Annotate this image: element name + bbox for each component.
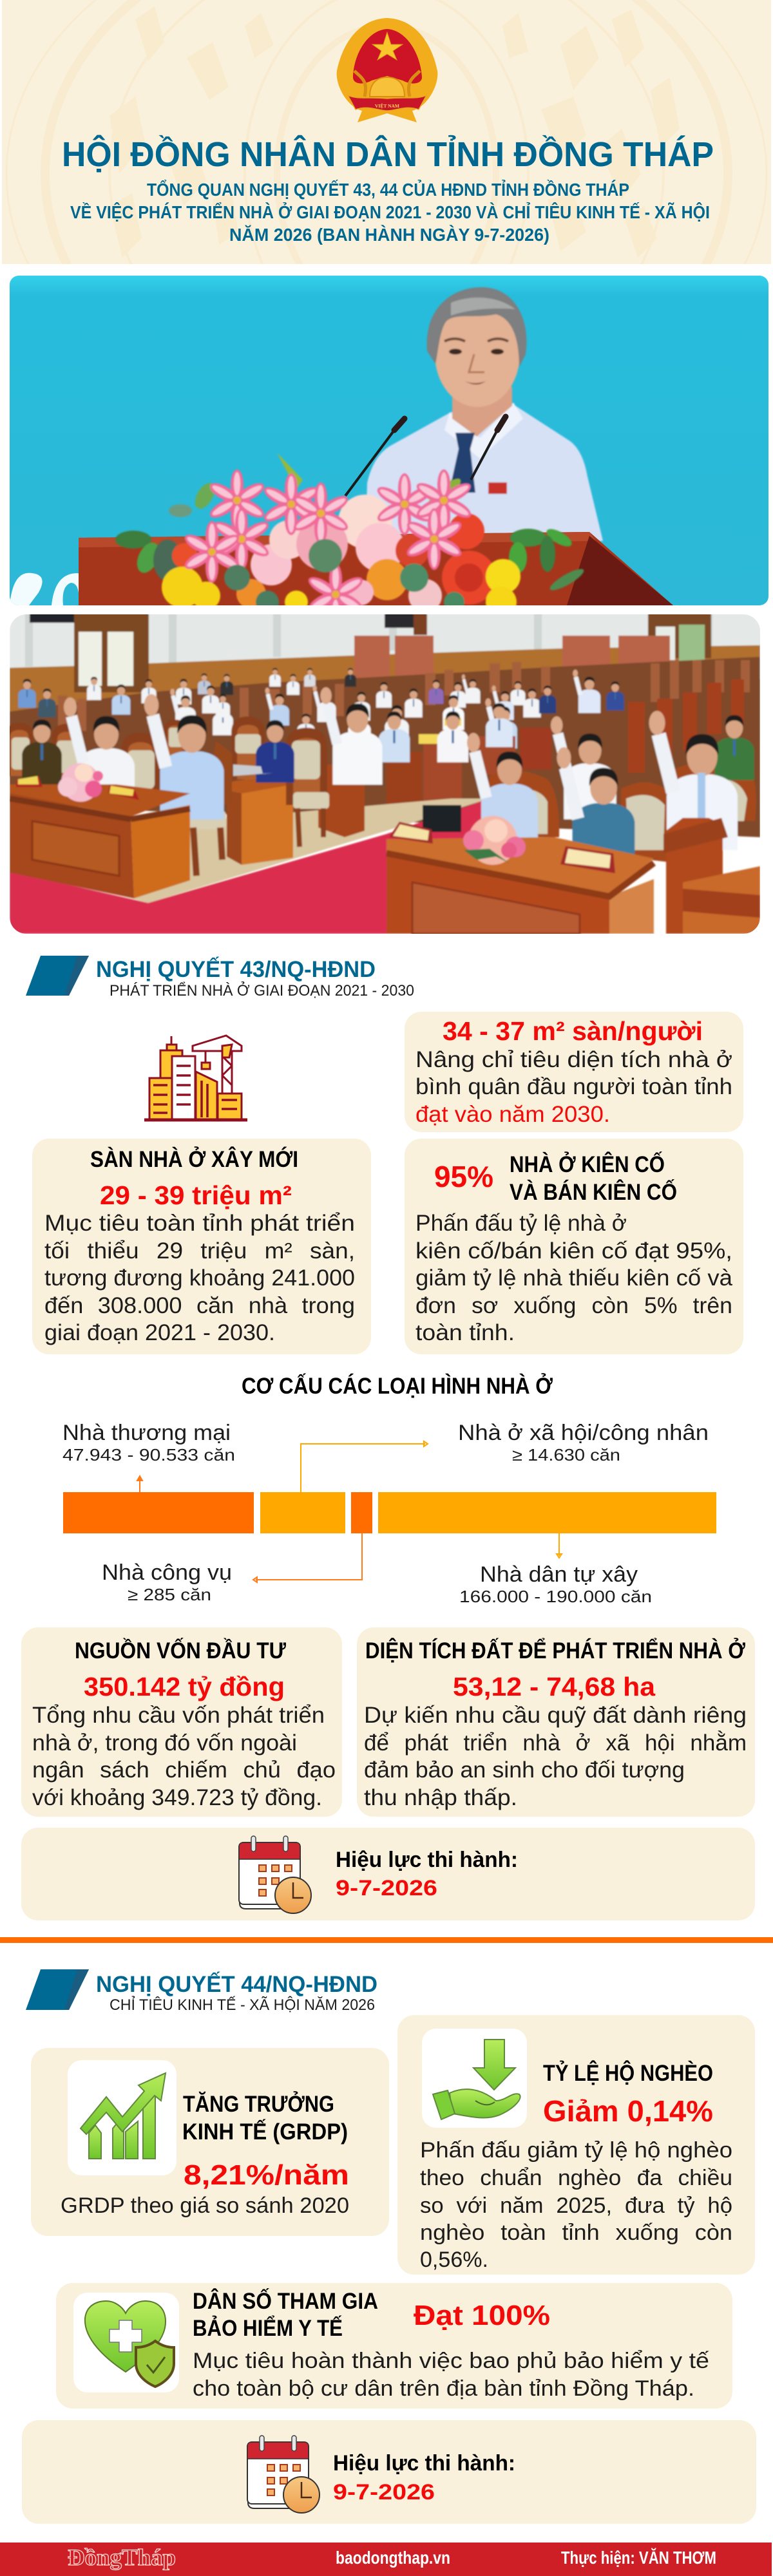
label: social: Nhà ở xã hội/công nhân: [458, 1421, 709, 1445]
section heading: resolution 44: CHỈ TIÊU KINH TẾ - XÃ HỘI NĂM 2026: [110, 1995, 375, 2014]
label: official: Nhà công vụ: [102, 1560, 232, 1585]
bar segment: official: [351, 1492, 372, 1533]
wall: [10, 612, 763, 679]
card: poverty rate: Giảm 0,14%: [543, 2094, 713, 2128]
effective date text: Hiệu lực thi hành:: [336, 1848, 518, 1872]
label: official: [102, 1560, 232, 1604]
header banner: [2, 0, 771, 264]
wainscot: [10, 645, 760, 715]
icon: heart and shield: [73, 2293, 179, 2392]
arrow: self-built: [557, 1533, 562, 1558]
card: land area: để phát triển nhà ở xã hội nhằm: [364, 1730, 747, 1756]
right flowers and plates: [468, 816, 517, 865]
subtitle: [70, 179, 710, 245]
card: GRDP growth: TĂNG TRƯỞNG: [183, 2091, 334, 2117]
card: land area: đảm bảo an sinh cho đối tượng: [364, 1757, 685, 1783]
website: baodongthap.vn: [336, 2548, 450, 2568]
label: social: ≥ 14.630 căn: [512, 1445, 620, 1464]
card: investment capital: với khoảng 349.723 tỷ đồng.: [32, 1785, 322, 1810]
credit: Thực hiện: VĂN THƠM: [561, 2548, 716, 2568]
far delegates: [18, 668, 624, 748]
card: permanent housing rate: VÀ BÁN KIÊN CỐ: [510, 1179, 677, 1205]
laptop: [233, 764, 274, 776]
card: health insurance: BẢO HIỂM Y TẾ: [193, 2315, 343, 2341]
cog: [370, 77, 405, 97]
icon: calendar and clock: [247, 2436, 320, 2513]
icon: arrow and hand: [422, 2029, 527, 2128]
icon: growth chart: [68, 2060, 177, 2175]
effective date text: 9-7-2026: [333, 2480, 435, 2505]
speaker: [365, 287, 603, 547]
section heading: resolution 44: [26, 1969, 377, 2014]
card: new housing floor area: đến 308.000 căn nhà trong: [44, 1293, 355, 1318]
title: HỘI ĐỒNG NHÂN DÂN TỈNH ĐỒNG THÁP: [62, 135, 714, 174]
section heading: resolution 43: PHÁT TRIỂN NHÀ Ở GIAI ĐOẠN 2021 - 2030: [110, 981, 414, 999]
card: investment capital: nhà ở, trong đó vốn ngoài: [32, 1730, 297, 1756]
effective date text: 9-7-2026: [336, 1876, 437, 1900]
card: permanent housing rate: kiên cố/bán kiên cố đạt 95%,: [415, 1238, 732, 1264]
card: permanent housing rate: toàn tỉnh.: [415, 1320, 515, 1345]
panel: effective date 44: [22, 2420, 756, 2524]
front right desk: [386, 837, 654, 895]
card: permanent housing rate: [405, 1139, 743, 1354]
label: commercial: Nhà thương mại: [62, 1421, 231, 1445]
card: permanent housing rate: giảm tỷ lệ nhà thiếu kiên cố và: [415, 1265, 733, 1291]
card: GRDP growth: KINH TẾ (GRDP): [182, 2119, 348, 2145]
left flowers and plates: [61, 763, 100, 802]
card: poverty rate: TỶ LỆ HỘ NGHÈO: [543, 2060, 713, 2086]
label: self-built: Nhà dân tự xây: [480, 1562, 638, 1587]
card: permanent housing rate: 95%: [434, 1160, 493, 1193]
bar segment: social: [260, 1492, 345, 1533]
front chairs left: [10, 724, 33, 777]
subtitle: TỔNG QUAN NGHỊ QUYẾT 43, 44 CỦA HĐND TỈNH ĐỒNG THÁP: [147, 179, 629, 200]
card: permanent housing rate: NHÀ Ở KIÊN CỐ: [510, 1151, 665, 1177]
floor: [126, 797, 482, 904]
star: [372, 32, 403, 60]
section heading: resolution 44: NGHỊ QUYẾT 44/NQ-HĐND: [96, 1971, 377, 1997]
section divider: [0, 1937, 773, 1943]
card: poverty rate: [397, 2015, 755, 2275]
label: self-built: [459, 1562, 652, 1606]
photo: speaker at podium: [10, 276, 768, 625]
card: land area: thu nhập thấp.: [364, 1785, 517, 1810]
effective date text: [336, 1848, 518, 1900]
flowers: [115, 452, 585, 605]
card: health insurance: Đạt 100%: [414, 2300, 550, 2331]
card: land area: Dự kiến nhu cầu quỹ đất dành riêng: [364, 1703, 747, 1728]
podium: [79, 532, 673, 605]
right delegates: [551, 716, 616, 819]
card: investment capital: [21, 1627, 342, 1817]
card: permanent housing rate: Phấn đấu tỷ lệ nhà ở: [415, 1211, 627, 1236]
section heading: resolution 43: [26, 956, 414, 999]
card: floor area per person: 34 - 37 m² sàn/người: [443, 1016, 703, 1046]
left desk: [10, 784, 190, 817]
card: new housing floor area: SÀN NHÀ Ở XÂY MỚI: [90, 1146, 298, 1172]
card: health insurance: Mục tiêu hoàn thành việc bao phủ bảo hiểm y tế: [193, 2349, 709, 2373]
icon: city buildings and crane: [144, 1036, 247, 1120]
microphones: [345, 430, 497, 496]
card: poverty rate: Phấn đấu giảm tỷ lệ hộ nghèo: [420, 2138, 732, 2163]
card: new housing floor area: 29 - 39 triệu m²: [100, 1180, 292, 1210]
card: investment capital: Tổng nhu cầu vốn phát triển: [32, 1703, 325, 1728]
subtitle: NĂM 2026 (BAN HÀNH NGÀY 9-7-2026): [229, 225, 549, 245]
card: floor area per person: Nâng chỉ tiêu diện tích nhà ở: [415, 1047, 732, 1072]
boards: [354, 636, 390, 681]
card: poverty rate: 0,56%.: [420, 2248, 488, 2272]
card: health insurance: DÂN SỐ THAM GIA: [193, 2288, 378, 2314]
label: self-built: 166.000 - 190.000 căn: [459, 1587, 652, 1606]
chart: housing types bar: [62, 1421, 716, 1606]
card: floor area per person: bình quân đầu người toàn tỉnh: [415, 1074, 732, 1099]
label: commercial: [62, 1421, 235, 1464]
card: permanent housing rate: đơn sơ xuống còn 5% trên: [415, 1293, 732, 1318]
card: new housing floor area: Mục tiêu toàn tỉnh phát triển: [44, 1211, 355, 1236]
photo: delegates voting in the hall: [5, 612, 763, 934]
card: health insurance: cho toàn bộ cư dân trên địa bàn tỉnh Đồng Tháp.: [193, 2376, 694, 2401]
emblem: [337, 18, 437, 122]
card: poverty rate: nghèo toàn tỉnh xuống còn: [420, 2221, 732, 2245]
card: new housing floor area: [32, 1139, 371, 1354]
card: investment capital: NGUỒN VỐN ĐẦU TƯ: [75, 1638, 287, 1663]
label: commercial: 47.943 - 90.533 căn: [62, 1445, 235, 1464]
arrow: official: [253, 1533, 362, 1582]
second row desks: [318, 763, 365, 837]
decorative drum pattern: [5, 0, 768, 264]
tv: [28, 614, 75, 623]
card: land area: 53,12 - 74,68 ha: [453, 1672, 656, 1701]
subtitle: VỀ VIỆC PHÁT TRIỂN NHÀ Ở GIAI ĐOẠN 2021 - 2030 VÀ CHỈ TIÊU KINH TẾ - XÃ HỘI: [70, 202, 710, 222]
section heading: resolution 43: NGHỊ QUYẾT 43/NQ-HĐND: [96, 956, 376, 982]
ribbon: [348, 95, 426, 111]
front delegates left: [22, 719, 62, 784]
card: GRDP growth: 8,21%/năm: [184, 2159, 349, 2191]
card: floor area per person: [405, 1012, 743, 1132]
effective date text: Hiệu lực thi hành:: [333, 2451, 515, 2476]
heading: housing structure: CƠ CẤU CÁC LOẠI HÌNH NHÀ Ở: [242, 1373, 553, 1399]
card: land area: [357, 1627, 755, 1817]
windows: [74, 612, 149, 692]
card: new housing floor area: tương đương khoảng 241.000: [44, 1265, 355, 1291]
bar segment: commercial: [63, 1492, 254, 1533]
card: new housing floor area: tối thiểu 29 triệu m² sàn,: [44, 1238, 355, 1264]
card: new housing floor area: giai đoạn 2021 - 2030.: [44, 1320, 275, 1345]
card: floor area per person: đạt vào năm 2030.: [415, 1102, 610, 1127]
card: health insurance: [56, 2283, 732, 2409]
card: GRDP growth: [31, 2048, 389, 2236]
arrow: social: [301, 1441, 428, 1492]
right chairs: [482, 770, 559, 837]
card: poverty rate: theo chuẩn nghèo đa chiều: [420, 2166, 732, 2190]
desks right: [666, 818, 723, 934]
ribbon text: VIỆT NAM: [375, 103, 399, 109]
panel: effective date 43: [21, 1828, 755, 1920]
label: official: ≥ 285 căn: [128, 1585, 211, 1604]
laptop: [423, 805, 461, 832]
mid desks: [386, 751, 423, 804]
hall rows: [10, 657, 760, 837]
footer: [0, 2543, 772, 2576]
effective date text: [333, 2451, 515, 2505]
label: social: [458, 1421, 709, 1464]
rice: [354, 71, 420, 97]
bar segment: self-built: [378, 1492, 716, 1533]
card: GRDP growth: GRDP theo giá so sánh 2020: [61, 2193, 349, 2218]
card: investment capital: ngân sách chiếm chủ đạo: [32, 1757, 336, 1783]
icon: calendar and clock: [239, 1836, 311, 1913]
carpet: [10, 799, 490, 934]
arrow: commercial: [137, 1476, 142, 1492]
logo: ĐồngTháp: [68, 2544, 176, 2570]
card: investment capital: 350.142 tỷ đồng: [84, 1672, 285, 1701]
card: poverty rate: so với năm 2025, đưa tỷ hộ: [420, 2193, 732, 2218]
